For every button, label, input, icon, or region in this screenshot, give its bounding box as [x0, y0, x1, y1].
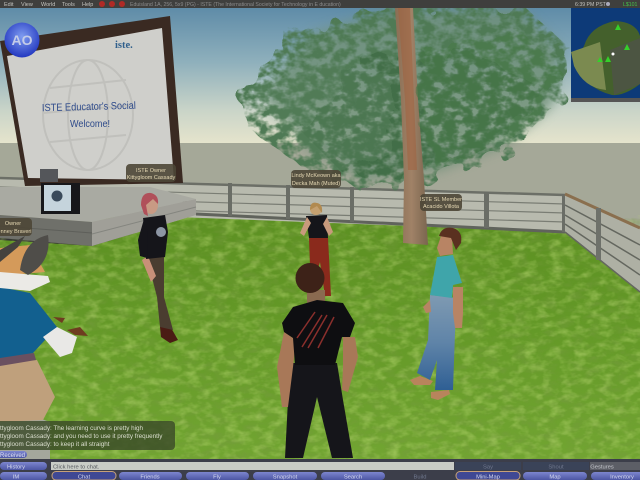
AO logo badge: AO	[12, 32, 33, 48]
lawn	[0, 215, 640, 462]
chat input: Click here to chat.	[53, 464, 100, 470]
top menu bar: Tools	[62, 2, 75, 8]
bottom toolbar	[0, 459, 640, 480]
screen title: ISTE Educator's Social	[42, 100, 136, 114]
tree canopy back	[235, 8, 572, 190]
stone platform	[0, 187, 196, 246]
tree trunk	[395, 8, 428, 245]
name tag: ISTE SL Member: ISTE SL Member	[420, 197, 462, 203]
distant grey wall	[0, 143, 640, 233]
history button: History	[7, 464, 25, 470]
say shout gestures: Gestures	[590, 464, 614, 470]
avatar: man in teal shirt and jeans	[410, 228, 463, 400]
name tag: Kittygloom Cassady	[126, 164, 176, 182]
right-hand railing	[565, 194, 640, 292]
top menu bar: Eduisland 1A, 256, 5x9 (PG) - ISTE (The International Society for Technology in E ducation)	[130, 2, 341, 8]
avatar: distant figure in red trousers	[300, 203, 333, 296]
name tag: ISTE SL Member: Acacido Villota	[423, 204, 460, 210]
received badge: Received	[0, 453, 25, 459]
presentation screen: Welcome!	[70, 118, 110, 130]
top menu bar: World	[41, 2, 55, 8]
chat history overlay: ttygloom Cassady: The learning curve is pretty high	[0, 425, 144, 432]
sky	[0, 8, 640, 144]
avatar: man in black t-shirt, foreground	[277, 263, 358, 458]
logo: iste.	[115, 40, 133, 51]
name tag: Lindy McKeown	[291, 170, 342, 188]
globe graphic	[43, 60, 133, 170]
received badge	[0, 451, 27, 459]
tree canopy front	[250, 30, 565, 170]
top menu bar: View	[21, 2, 33, 8]
top menu bar	[0, 0, 640, 8]
name tag: Lindy McKeown: Decka Mah (Muted)	[292, 181, 340, 187]
say shout gestures: Say	[483, 464, 493, 470]
name tag: Kittygloom Cassady: ISTE Owner	[136, 168, 166, 174]
name tag: owner, left: Owner	[5, 221, 21, 227]
chat history overlay	[0, 421, 175, 450]
top menu bar: L$101	[623, 2, 638, 8]
avatar: woman in black, left	[138, 193, 178, 343]
top menu bar: 6:39 PM PST	[575, 2, 607, 8]
button row	[0, 472, 640, 480]
name tag: ISTE SL Member	[420, 194, 462, 211]
name tag: Kittygloom Cassady: Kittygloom Cassady	[127, 175, 176, 181]
stand and small sign	[40, 169, 80, 214]
presentation screen	[0, 16, 183, 186]
mini map	[571, 8, 640, 102]
AO logo badge	[4, 22, 40, 58]
name tag: Lindy McKeown: Lindy McKeown aka	[291, 173, 342, 179]
screen surface	[7, 28, 174, 180]
screen frame	[0, 16, 183, 186]
avatar: furry character, left foreground	[0, 235, 88, 460]
say shout gestures	[455, 462, 640, 470]
history button	[0, 462, 47, 470]
say shout gestures: Shout	[548, 464, 564, 470]
top menu bar: Help	[82, 2, 93, 8]
chat history overlay: ttygloom Cassady: to keep it all straight	[0, 441, 110, 448]
railing fence	[0, 178, 640, 292]
name tag: owner, left	[0, 218, 32, 236]
top menu bar: Edit	[4, 2, 14, 8]
chat history overlay: ttygloom Cassady: and you need to use it pretty frequently	[0, 433, 163, 440]
chat input	[51, 462, 454, 470]
